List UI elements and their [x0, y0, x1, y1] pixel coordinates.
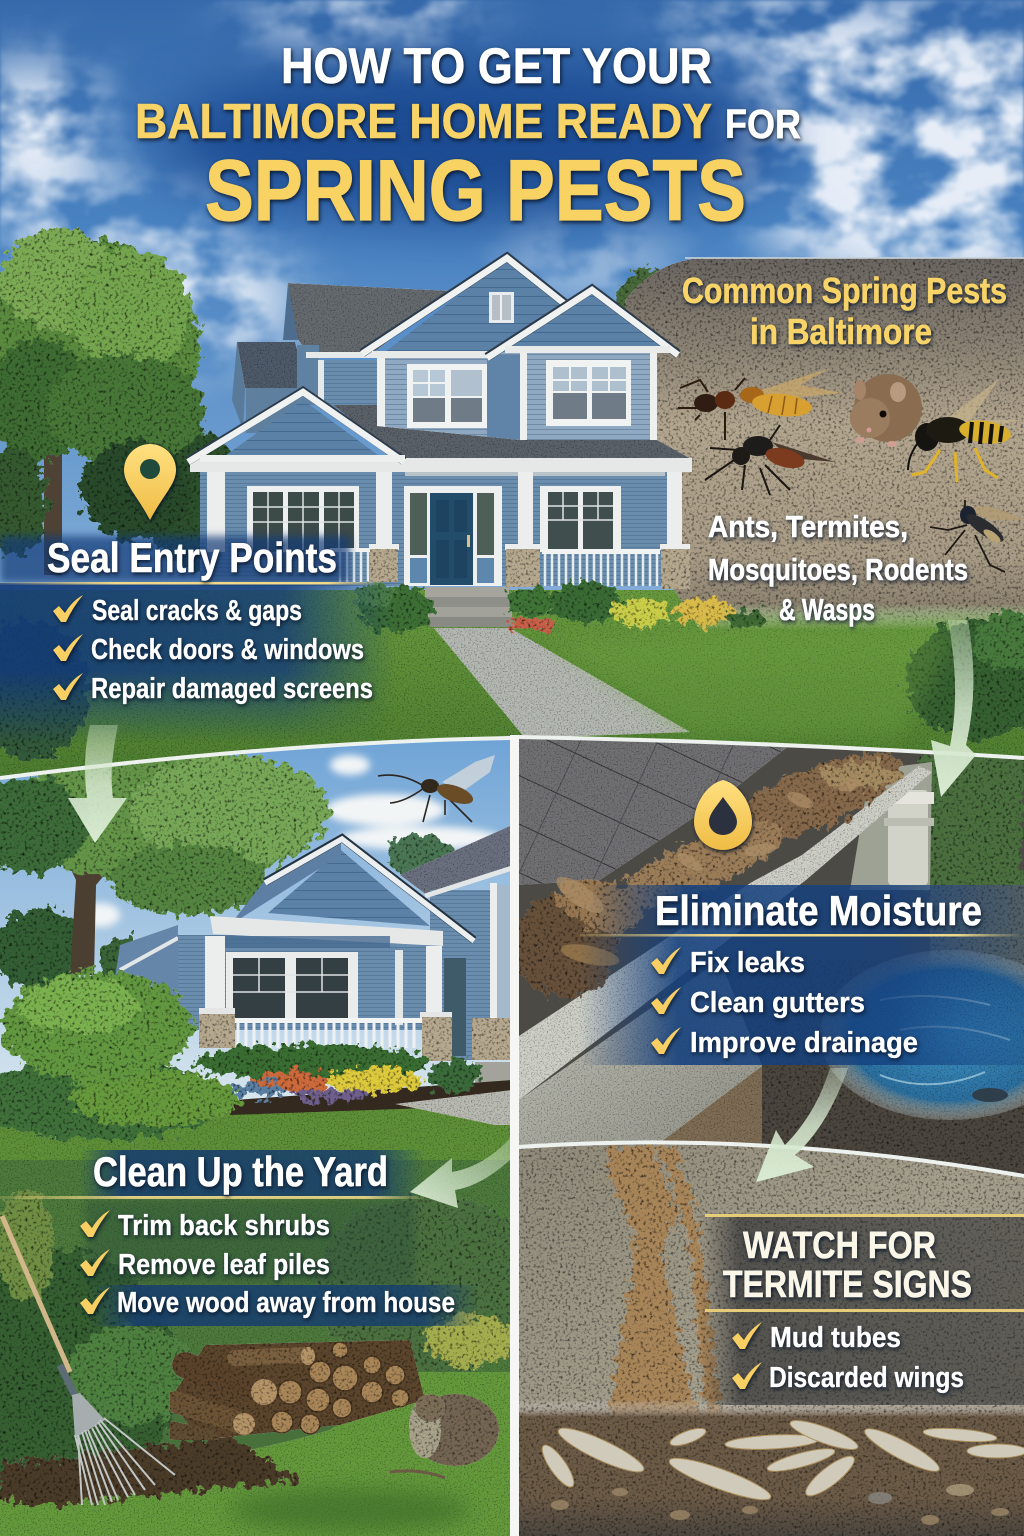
checklist: Repair damaged screens — [91, 673, 373, 705]
pests background panel — [612, 258, 1024, 630]
checklist: Remove leaf piles — [118, 1249, 330, 1281]
upper windows — [407, 360, 631, 428]
door — [404, 486, 502, 586]
heading: WATCH FOR — [743, 1225, 936, 1267]
panel: seal entry points — [0, 534, 395, 743]
house: yard — [112, 825, 512, 1088]
upper walls — [377, 352, 657, 444]
shingles — [519, 737, 800, 885]
side dormer — [237, 342, 308, 388]
pebbles — [551, 1484, 1009, 1525]
water — [820, 950, 1024, 1120]
title — [135, 38, 801, 239]
gutter side — [850, 762, 932, 890]
checklist: Check doors & windows — [91, 634, 364, 666]
title glow — [160, 60, 780, 220]
pests heading — [682, 270, 1007, 352]
panel: eliminate moisture — [580, 885, 1024, 1065]
lower roof — [333, 405, 695, 461]
shrubs and flowers — [355, 581, 765, 632]
checklist: Seal cracks & gaps — [92, 595, 302, 627]
checklist — [732, 1322, 964, 1394]
checklist: Fix leaks — [690, 947, 805, 979]
walkway — [434, 628, 690, 738]
lawn: yard — [0, 1108, 510, 1160]
shrubs: yard — [0, 971, 481, 1140]
rake — [2, 1216, 175, 1505]
title: SPRING PESTS — [205, 143, 746, 239]
arrow: yard to next — [410, 1138, 510, 1208]
lower yard — [0, 1160, 512, 1375]
arrow: moisture to termite — [756, 1068, 848, 1182]
panel: top hero scene — [0, 0, 1024, 780]
log pile — [170, 1340, 425, 1440]
porch wall — [200, 470, 682, 586]
path: yard — [395, 1090, 512, 1125]
steps — [425, 587, 514, 627]
dividers — [0, 737, 1024, 1176]
heading: Eliminate Moisture — [655, 887, 982, 934]
wasp: yard — [378, 755, 495, 822]
lawn — [0, 590, 1024, 780]
title: FOR — [725, 101, 801, 147]
checklist: Mud tubes — [770, 1322, 901, 1354]
panel: clean up the yard — [0, 1148, 480, 1326]
mulch — [230, 1080, 512, 1115]
icon: mouse — [850, 374, 922, 447]
ground — [746, 966, 1024, 1174]
clouds — [0, 0, 1024, 393]
right gable — [505, 295, 662, 347]
gutter — [519, 960, 762, 1150]
pests list text: & Wasps — [779, 592, 875, 627]
mud tube — [602, 1147, 726, 1430]
title: BALTIMORE HOME READY — [135, 95, 712, 149]
icon: winged ant — [678, 368, 843, 440]
house — [188, 257, 695, 627]
common spring pests illustrations — [678, 368, 1024, 572]
heading: Clean Up the Yard — [93, 1148, 388, 1195]
pests heading: in Baltimore — [750, 311, 932, 352]
downspout — [884, 790, 934, 885]
groundhog — [390, 1394, 499, 1478]
porch gable — [222, 400, 382, 458]
icon: location pin — [124, 444, 176, 520]
title: HOW TO GET YOUR — [281, 38, 712, 94]
panel: watch for termite signs: TERMITE SIGNS — [723, 1264, 972, 1306]
checklist: Improve drainage — [690, 1027, 918, 1059]
checklist — [53, 595, 373, 705]
checklist: Move wood away from house — [117, 1287, 455, 1319]
railings — [340, 550, 657, 586]
trees: moisture — [920, 755, 1024, 895]
columns — [207, 472, 690, 552]
icon: wasp — [908, 378, 1020, 482]
icon: mosquito — [930, 500, 1024, 572]
icon: termite — [705, 425, 835, 495]
pests list text: Ants, Termites, — [708, 509, 908, 544]
panel: moisture scene — [513, 735, 1024, 1180]
heading: Seal Entry Points — [47, 534, 337, 581]
right hedge — [0, 610, 1024, 760]
arrow: pests to moisture — [931, 620, 976, 797]
porch window left — [247, 486, 359, 552]
main gable — [385, 258, 567, 352]
checklist — [651, 947, 918, 1059]
stone bases — [370, 549, 690, 589]
checklist: Discarded wings — [769, 1362, 964, 1394]
lawn: bottom — [0, 1372, 512, 1536]
arrow: seal to yard — [68, 725, 127, 843]
pests list text — [708, 509, 968, 627]
leaves — [513, 735, 914, 997]
porch window right — [540, 486, 621, 552]
pests list text: Mosquitoes, Rodents — [708, 552, 968, 587]
icon: water drop — [694, 780, 752, 850]
lawn highlight — [545, 628, 960, 738]
gravel — [519, 1400, 1024, 1536]
upper roof — [288, 283, 452, 354]
panel: yard scene — [0, 735, 545, 1536]
tree: left — [0, 230, 243, 575]
wings — [542, 1420, 1024, 1500]
checklist: Trim back shrubs — [118, 1210, 330, 1242]
panel: termite scene — [519, 1130, 1024, 1536]
clouds: yard — [80, 755, 500, 927]
tree: yard background — [0, 747, 454, 992]
checklist: Clean gutters — [690, 987, 865, 1019]
panel: watch for termite signs — [700, 1214, 1024, 1405]
checklist — [80, 1210, 455, 1319]
